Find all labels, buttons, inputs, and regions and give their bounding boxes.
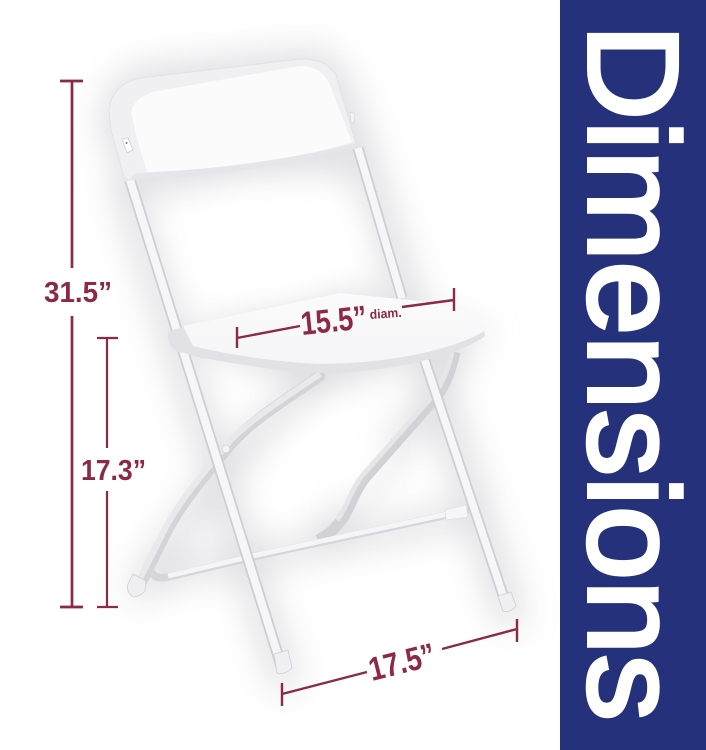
pivot knob	[222, 445, 230, 453]
measure: 15.5 inch seat diameter: 15.5”	[299, 298, 368, 342]
measure: 15.5 inch seat diameter: diam.	[369, 305, 402, 322]
front right leg, lower	[424, 358, 506, 604]
measure: 31.5 inch overall height: 31.5”	[44, 277, 112, 309]
title: Dimensions: Dimensions	[561, 24, 704, 721]
backrest rivet left	[122, 138, 133, 153]
crossbar	[151, 511, 466, 578]
rear folding leg: left	[141, 376, 320, 583]
soft chair shadow	[100, 48, 510, 680]
measure: 31.5 inch overall height	[44, 81, 112, 607]
measure: 17.5 inch leg spread: 17.5”	[365, 636, 439, 688]
seat pivot	[168, 326, 203, 358]
backrest rivet right	[350, 112, 355, 123]
measure: 17.3 inch seat height: 17.3”	[81, 455, 146, 487]
measure: 17.5 inch leg spread	[282, 619, 517, 706]
rear folding leg: right	[318, 352, 455, 540]
foot cap right	[498, 592, 516, 611]
measure: 15.5 inch seat diameter	[237, 288, 454, 348]
rear foot	[128, 574, 146, 596]
side panel	[560, 0, 706, 750]
seat	[168, 293, 485, 373]
front right leg, upper	[358, 148, 402, 298]
foot cap left	[274, 650, 292, 673]
chair	[109, 59, 516, 673]
front left leg	[130, 180, 281, 665]
crossbar bracket	[445, 505, 468, 520]
backrest	[109, 59, 356, 180]
white clearing behind the chair	[185, 190, 355, 290]
measure: 17.3 inch seat height	[81, 338, 146, 607]
